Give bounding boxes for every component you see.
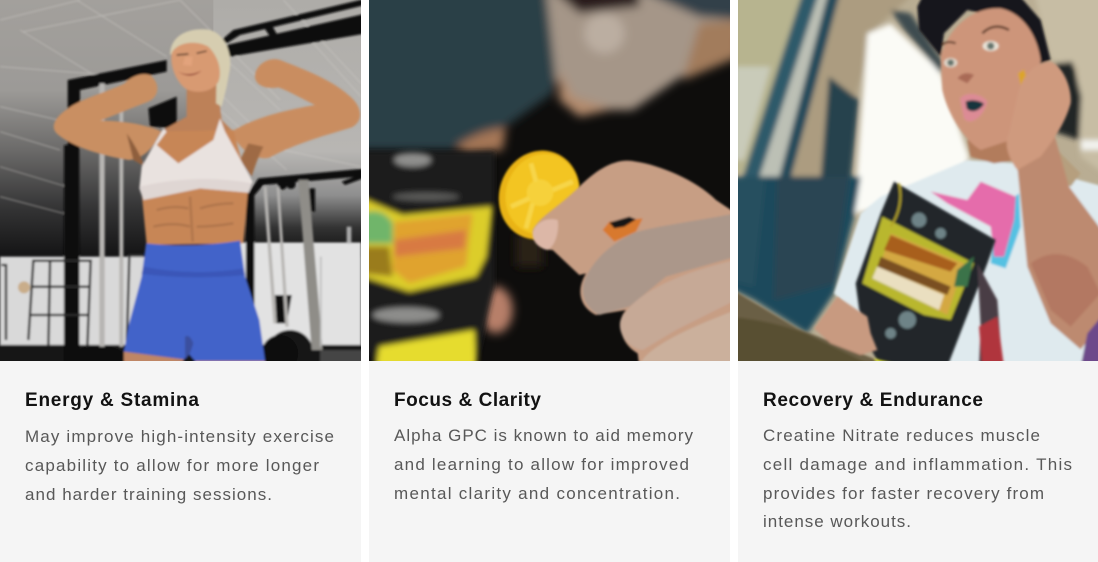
heading: Focus & Clarity (394, 390, 541, 411)
shirt (834, 0, 1098, 367)
fist and gummy (1018, 69, 1027, 85)
body copy: and harder training sessions. (25, 485, 272, 504)
body copy (394, 426, 694, 503)
athlete (54, 29, 360, 367)
photo: hand holding a yellow gummy (369, 0, 730, 361)
gummy pack (856, 182, 1004, 367)
body copy: cell damage and inflammation. This (763, 455, 1072, 474)
heading: Energy & Stamina (25, 390, 199, 411)
photo: athlete flexing in a gym (0, 0, 361, 361)
flexing arm left (54, 74, 160, 160)
blue shorts (124, 241, 265, 361)
back wall frames (1, 255, 143, 347)
body copy: intense workouts. (763, 512, 911, 531)
body copy: May improve high-intensity exercise (25, 427, 334, 446)
body copy (763, 426, 1072, 531)
panel: energy and stamina (0, 0, 361, 562)
arm (1011, 133, 1098, 349)
body copy: Alpha GPC is known to aid memory (394, 426, 694, 445)
body copy: and learning to allow for improved (394, 455, 689, 474)
gym rack (64, 0, 367, 377)
text block: recovery and endurance (763, 390, 1072, 531)
cap (917, 0, 1051, 67)
face (171, 43, 220, 92)
hand and fingers (532, 161, 736, 367)
panel: recovery and endurance (738, 0, 1098, 562)
photo: woman in a car with a gummy pack (738, 0, 1098, 361)
ceiling tile grid (0, 0, 361, 213)
body copy (25, 427, 334, 504)
body copy: Creatine Nitrate reduces muscle (763, 426, 1040, 445)
car interior (727, 0, 1098, 333)
blurred background (356, 0, 743, 333)
text block: energy and stamina (25, 390, 334, 504)
abs shading (153, 197, 233, 242)
body copy: provides for faster recovery from (763, 484, 1044, 503)
cable columns (99, 83, 323, 350)
blurred product pack (363, 152, 494, 367)
white sports bra (139, 118, 253, 200)
heading: Recovery & Endurance (763, 390, 983, 411)
body copy: mental clarity and concentration. (394, 484, 680, 503)
legs and hand (727, 287, 894, 367)
panel: focus and clarity (369, 0, 730, 562)
text block: focus and clarity (394, 390, 694, 503)
flexing arm right (232, 59, 360, 158)
body copy: capability to allow for more longer (25, 456, 319, 475)
hair (170, 29, 230, 107)
gummy coin (486, 139, 592, 251)
neck and face (967, 140, 1017, 163)
